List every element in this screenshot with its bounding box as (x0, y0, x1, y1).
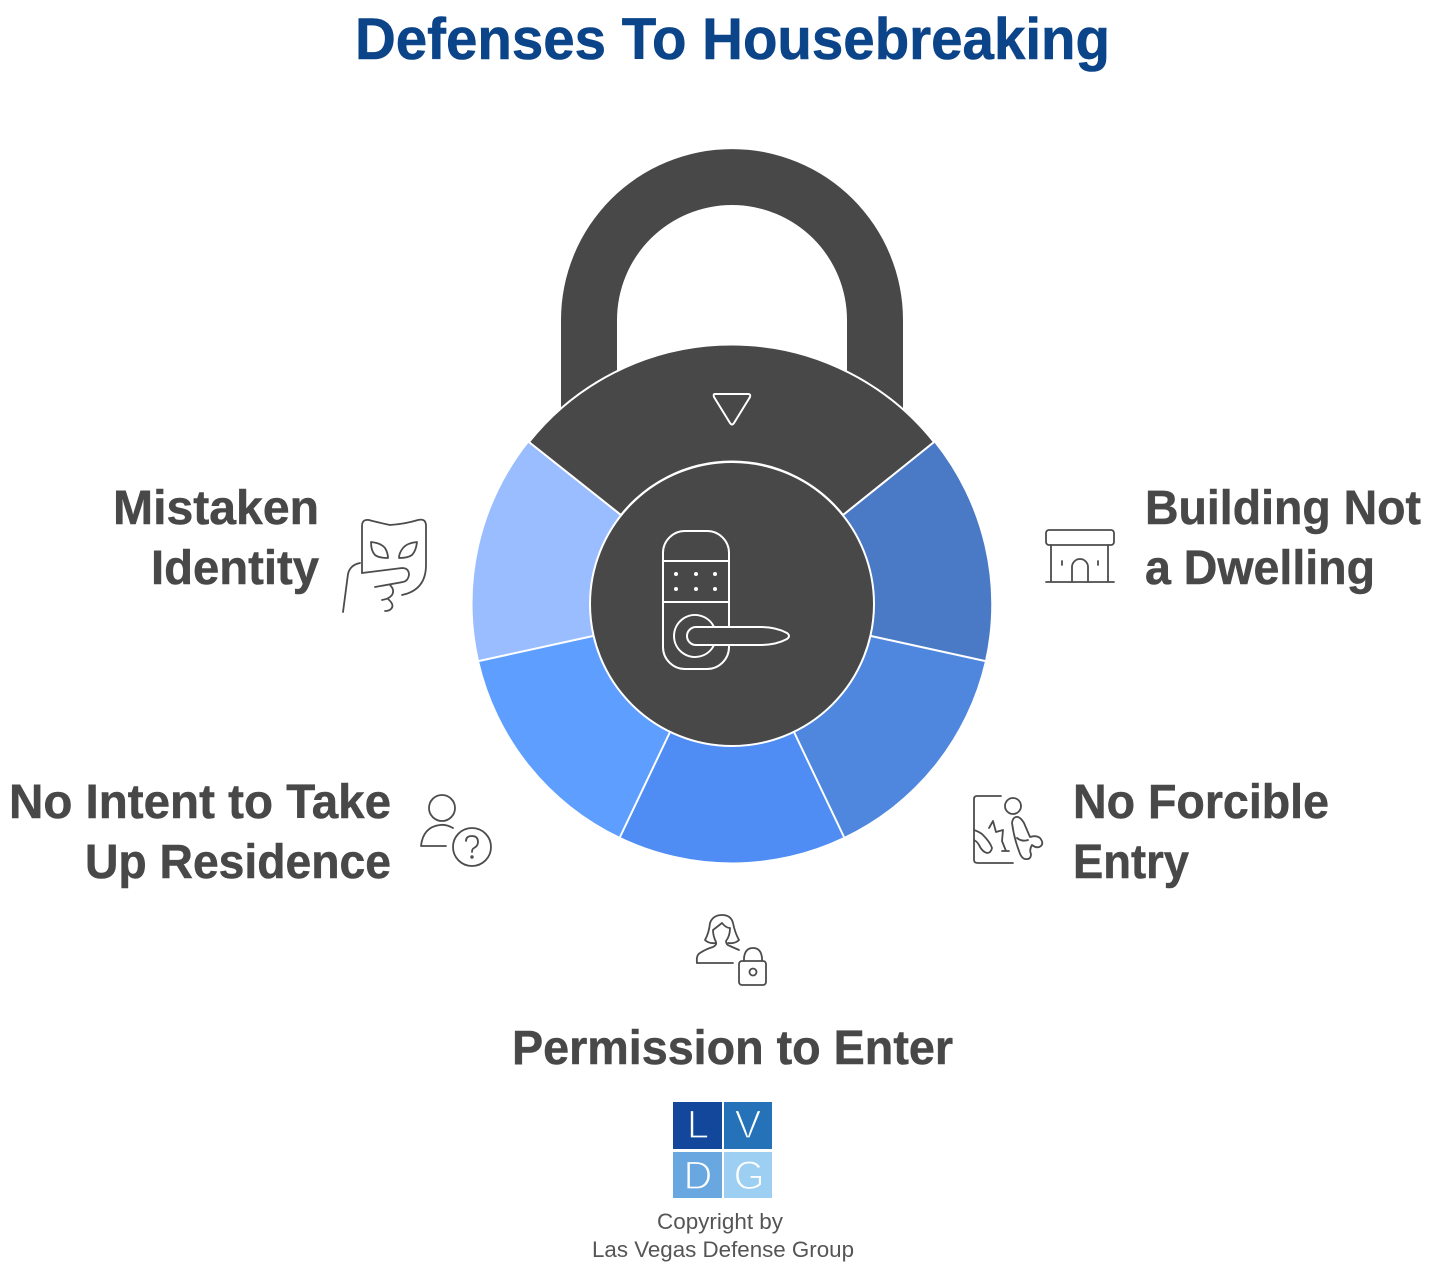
label: building not a dwelling (1145, 482, 1421, 595)
copyright text: Copyright by (657, 1209, 783, 1234)
segment: permission to enter (620, 732, 844, 862)
title: Defenses To Housebreaking (355, 7, 1110, 72)
icon: person forcing door (974, 796, 1042, 863)
label: mistaken identity: Mistaken (113, 482, 319, 535)
segment: mistaken identity (473, 442, 621, 661)
logo: LVDG: L (687, 1103, 709, 1147)
segment: building not a dwelling (843, 442, 991, 661)
label: no intent to take up residence: No Intent to Take (9, 776, 391, 829)
logo: LVDG: D (684, 1154, 712, 1198)
segment: no intent to take up residence (479, 636, 670, 837)
label: mistaken identity (113, 482, 319, 595)
padlock graphic (473, 149, 991, 862)
icon: door lock with keypad (663, 531, 789, 669)
icon: woman with padlock (697, 915, 766, 985)
segment: top dial (529, 344, 934, 515)
logo: LVDG: V (735, 1103, 762, 1147)
icon: commercial building (1046, 530, 1114, 582)
center hub (590, 462, 874, 746)
icon: person with question mark (421, 795, 491, 866)
copyright text (592, 1209, 854, 1262)
copyright text: Las Vegas Defense Group (592, 1237, 854, 1262)
segment: no forcible entry (794, 636, 985, 837)
label: building not a dwelling: a Dwelling (1145, 542, 1375, 595)
icon: mask held by hand (343, 520, 426, 612)
label: no intent to take up residence: Up Residence (85, 836, 391, 889)
label: no forcible entry: No Forcible (1073, 776, 1329, 829)
label: mistaken identity: Identity (151, 542, 319, 595)
triangle marker (714, 394, 750, 424)
padlock shackle (561, 149, 903, 420)
logo: LVDG (673, 1102, 772, 1198)
label: permission to enter: Permission to Enter (512, 1022, 953, 1075)
label: no intent to take up residence (9, 776, 391, 889)
label: no forcible entry (1073, 776, 1329, 889)
label: no forcible entry: Entry (1073, 836, 1189, 889)
logo: LVDG: G (733, 1154, 765, 1198)
label: building not a dwelling: Building Not (1145, 482, 1421, 535)
